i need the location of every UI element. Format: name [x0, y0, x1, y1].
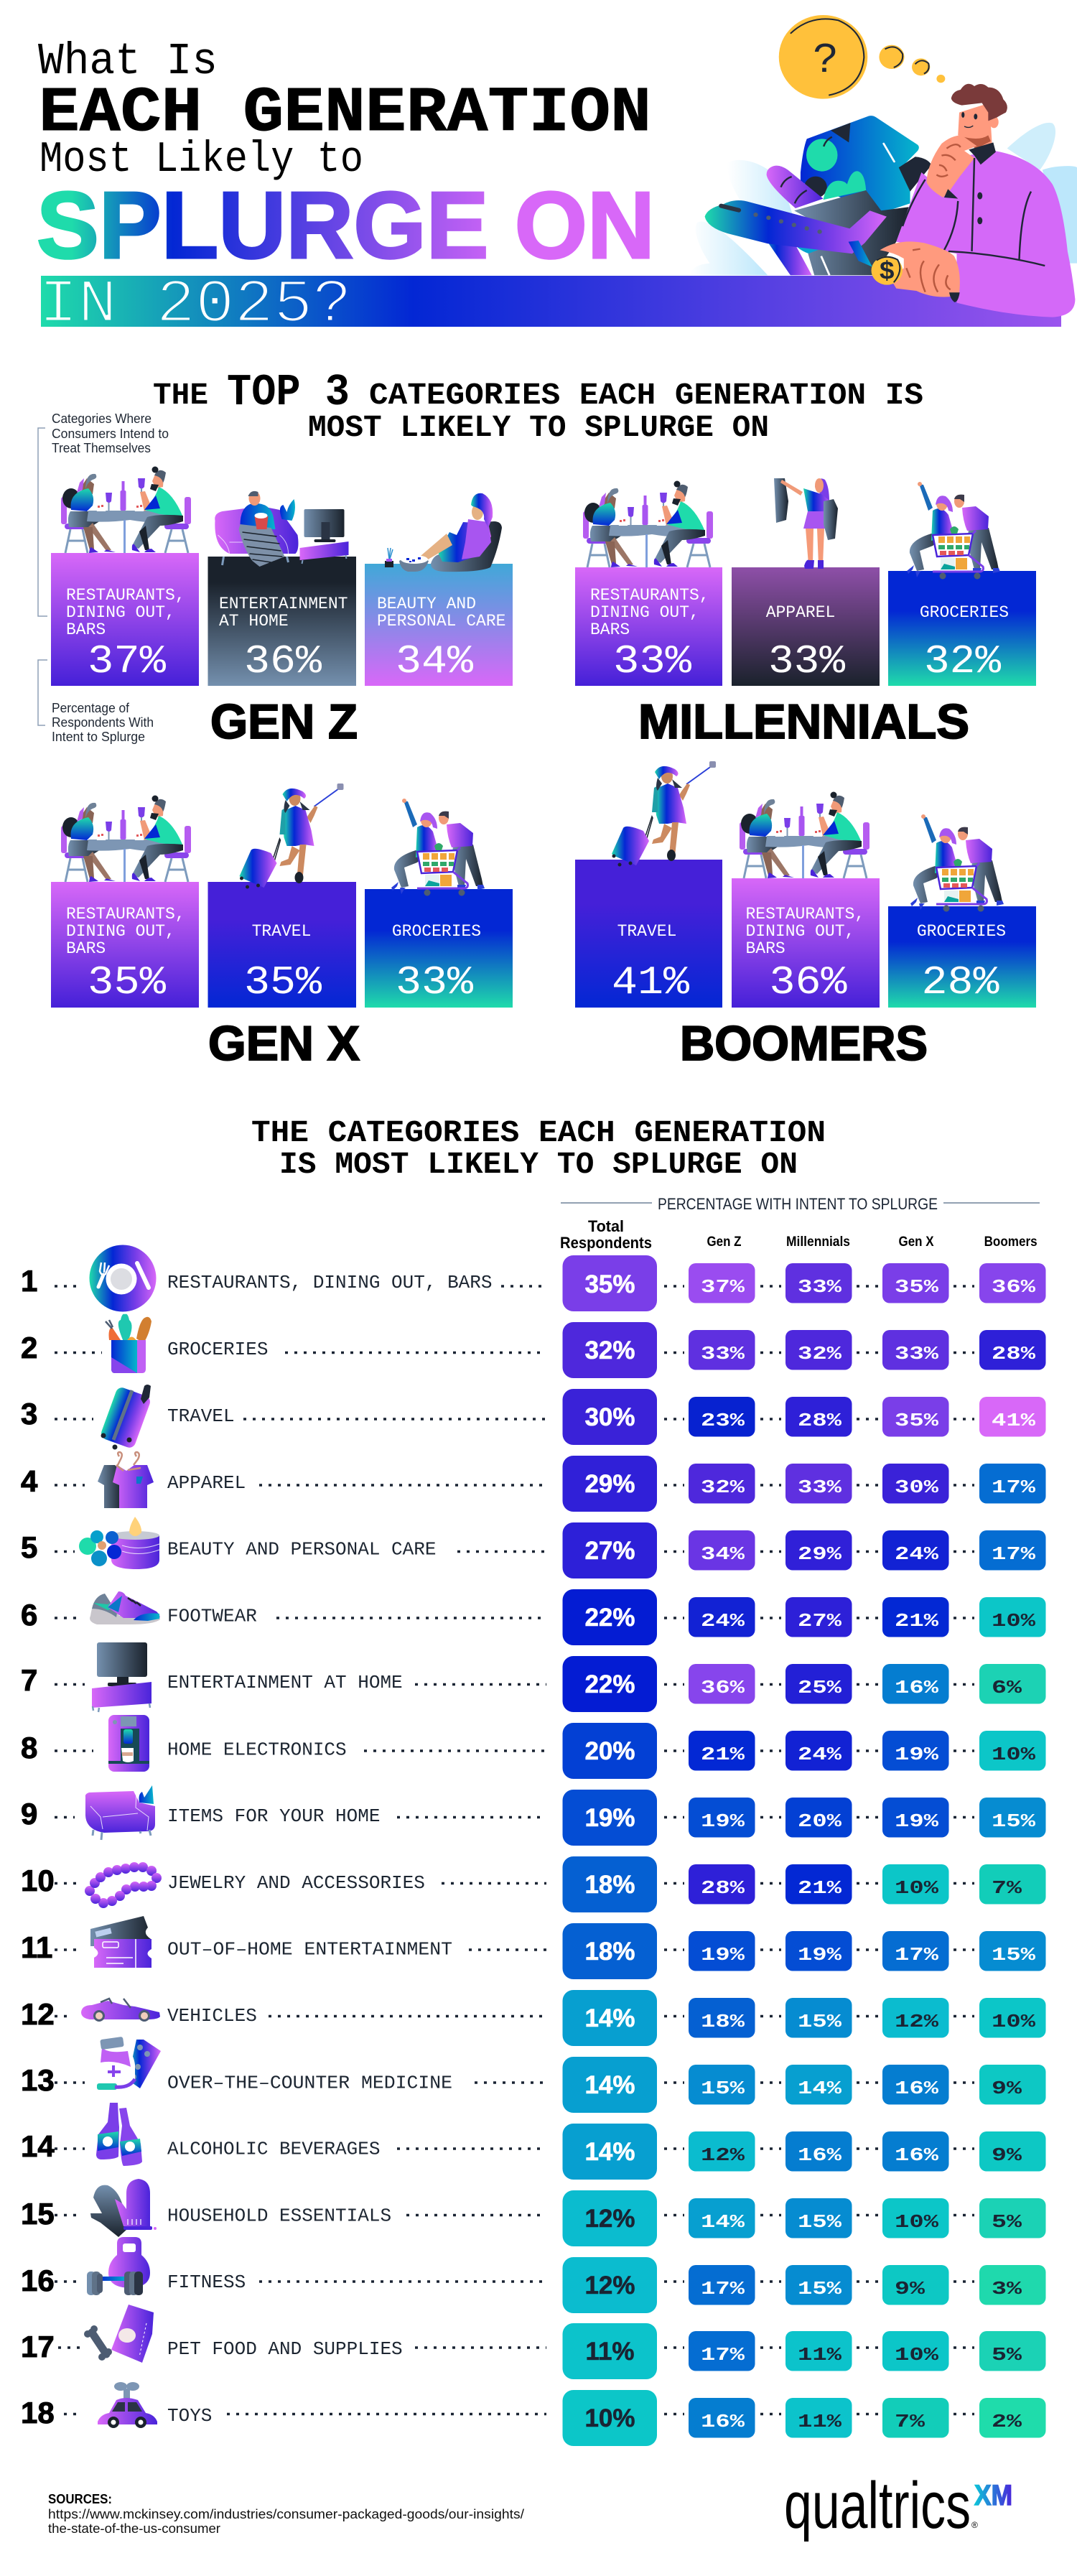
- total 29%: [563, 1456, 657, 1512]
- illustration: shopping cart couple: [910, 814, 1004, 912]
- bar: restaurants: BARS: [66, 939, 106, 958]
- row 5: 29%: [798, 1543, 842, 1565]
- row 1: 37%: [701, 1276, 745, 1298]
- row 2: 2: [21, 1331, 37, 1364]
- row 6: [21, 1589, 1045, 1645]
- row 1: 33%: [798, 1276, 842, 1298]
- row 4: 4: [21, 1464, 38, 1498]
- table header: PERCENTAGE WITH INTENT TO SPLURGE: [658, 1195, 938, 1213]
- bar: beauty and personal care: [365, 564, 513, 686]
- bar: apparel: [732, 567, 880, 686]
- row 13: 9%: [992, 2078, 1022, 2099]
- bar: travel: 35%: [244, 959, 322, 1005]
- icon: t-shirts on hangers: [98, 1452, 154, 1508]
- row 14: 16%: [798, 2144, 842, 2166]
- total 11%: 11%: [585, 2338, 635, 2366]
- bar: travel: TRAVEL: [617, 922, 676, 941]
- bar: restaurants: 36%: [770, 959, 847, 1005]
- total 18%: 18%: [584, 1938, 635, 1966]
- row 9: 15%: [992, 1810, 1036, 1832]
- row 4: 17%: [992, 1477, 1036, 1498]
- annotation: percentage note: Intent to Splurge: [52, 730, 145, 744]
- row 2: [21, 1314, 1045, 1378]
- bar: beauty and personal care: BEAUTY AND: [377, 595, 476, 613]
- row 10: 10%: [895, 1877, 939, 1899]
- row 9: ITEMS FOR YOUR HOME: [167, 1805, 380, 1827]
- row 16: FITNESS: [167, 2272, 246, 2293]
- label: gen z: GEN Z: [210, 694, 358, 749]
- row 1: 1: [21, 1264, 37, 1298]
- row 15: 10%: [895, 2211, 939, 2233]
- section heading: the top 3 categories: TOP 3: [227, 367, 350, 418]
- row 13: 16%: [895, 2078, 939, 2099]
- row 17: 17%: [701, 2344, 745, 2366]
- icon: medicine bottle and blister pack: [97, 2037, 161, 2090]
- section heading: categories table: [251, 1115, 826, 1182]
- row 11: 19%: [798, 1944, 842, 1966]
- row 16: 15%: [798, 2278, 842, 2300]
- row 12: 12%: [895, 2011, 939, 2032]
- row 3: TRAVEL: [167, 1405, 235, 1427]
- icon: coffee machine: [108, 1715, 149, 1772]
- total 29%: 29%: [584, 1470, 635, 1498]
- bar: restaurants: DINING OUT,: [745, 922, 854, 941]
- total 35%: [563, 1255, 657, 1311]
- row 15: 5%: [992, 2211, 1022, 2233]
- row 8: 8: [21, 1731, 37, 1764]
- row 9: [21, 1785, 1045, 1846]
- sources: https://www.mckinsey.com/industries/consumer-packaged-goods/our-insights/: [48, 2507, 524, 2521]
- label: boomers: BOOMERS: [680, 1016, 928, 1071]
- row 4: [21, 1452, 1045, 1512]
- bar: restaurants: RESTAURANTS,: [66, 586, 185, 605]
- row 12: 15%: [798, 2011, 842, 2032]
- bar: restaurants: [51, 882, 199, 1008]
- icon: pet food and bone: [84, 2305, 154, 2363]
- icon: convertible car: [81, 1999, 160, 2022]
- annotation: percentage note: Respondents With: [52, 715, 154, 730]
- illustration: foot spa: [385, 493, 502, 572]
- row 8: 19%: [895, 1744, 939, 1765]
- section heading: the top 3 categories: MOST LIKELY TO SPLURGE ON: [308, 410, 769, 445]
- total 10%: [563, 2390, 657, 2446]
- title: SPLURGE ON: [37, 172, 655, 278]
- row 16: 3%: [992, 2278, 1022, 2300]
- title: EACH GENERATION: [39, 78, 651, 149]
- row 3: 3: [21, 1397, 37, 1431]
- total 19%: [563, 1790, 657, 1846]
- row 7: 25%: [798, 1677, 842, 1698]
- icon: dollar coin: $: [880, 256, 895, 284]
- row 18: TOYS: [167, 2405, 212, 2427]
- sources: SOURCES:: [48, 2492, 112, 2506]
- row 4: 33%: [798, 1477, 842, 1498]
- row 12: 12: [21, 1997, 55, 2031]
- row 11: 15%: [992, 1944, 1036, 1966]
- section heading: the top 3 categories: CATEGORIES EACH GENERATION IS: [369, 378, 923, 413]
- total 22%: [563, 1656, 657, 1712]
- total 22%: [563, 1589, 657, 1645]
- sources: the-state-of-the-us-consumer: [48, 2521, 220, 2536]
- total 14%: [563, 2124, 657, 2180]
- row 1: 35%: [895, 1276, 939, 1298]
- row 14: 14: [21, 2129, 55, 2163]
- row 1: RESTAURANTS, DINING OUT, BARS: [167, 1272, 492, 1293]
- row 16: [21, 2237, 1045, 2313]
- row 4: APPAREL: [167, 1472, 246, 1494]
- panel: gen z: [51, 467, 513, 749]
- row 6: 6: [21, 1598, 37, 1632]
- total 11%: [563, 2323, 657, 2379]
- annotation: categories note: Treat Themselves: [52, 441, 151, 455]
- row 7: ENTERTAINMENT AT HOME: [167, 1672, 403, 1693]
- row 6: 10%: [992, 1610, 1036, 1632]
- bar: restaurants: [575, 567, 722, 686]
- bar: travel: TRAVEL: [252, 922, 311, 941]
- bar: restaurants: 35%: [88, 959, 166, 1005]
- row 10: 10: [21, 1864, 55, 1897]
- row 13: [21, 2037, 1045, 2113]
- row 17: PET FOOD AND SUPPLIES: [167, 2338, 403, 2360]
- row 5: 24%: [895, 1543, 939, 1565]
- row 4: 30%: [895, 1477, 939, 1498]
- icon: sofa and plant: [85, 1785, 155, 1840]
- table header: [560, 1195, 1040, 1252]
- bar: restaurants: [732, 878, 880, 1008]
- row 15: 15%: [798, 2211, 842, 2233]
- bar: restaurants: [51, 553, 199, 686]
- sources: [48, 2492, 524, 2536]
- total 22%: 22%: [584, 1604, 635, 1632]
- row 16: 16: [21, 2264, 55, 2297]
- bar: travel: 41%: [612, 959, 689, 1005]
- bar: restaurants: 33%: [613, 638, 691, 684]
- row 3: [21, 1385, 1045, 1449]
- bar: entertainment at home: ENTERTAINMENT: [219, 595, 348, 613]
- figure: man: [880, 84, 1075, 317]
- annotation: categories note: [38, 411, 169, 616]
- row 2: 33%: [701, 1343, 745, 1364]
- row 2: 28%: [992, 1343, 1036, 1364]
- total 19%: 19%: [584, 1804, 635, 1832]
- bar: groceries: 28%: [922, 959, 999, 1005]
- total 12%: [563, 2190, 657, 2246]
- bar: groceries: 32%: [924, 638, 1001, 684]
- bar: beauty and personal care: PERSONAL CARE: [377, 612, 505, 631]
- icon: grocery bag: [106, 1314, 151, 1373]
- bar: restaurants: BARS: [66, 620, 106, 639]
- section heading: categories table: THE CATEGORIES EACH GENERATION: [251, 1115, 826, 1150]
- row 8: HOME ELECTRONICS: [167, 1739, 347, 1761]
- row 18: 11%: [798, 2411, 842, 2432]
- row 5: 34%: [701, 1543, 745, 1565]
- annotation: percentage note: Percentage of: [52, 701, 130, 715]
- row 13: 15%: [701, 2078, 745, 2099]
- table header: Total: [588, 1217, 624, 1235]
- annotation: categories note: Consumers Intend to: [52, 427, 169, 441]
- bar: groceries: [888, 571, 1036, 686]
- icon: kettlebell and dumbbell: [87, 2237, 150, 2295]
- bar: groceries: GROCERIES: [917, 922, 1006, 941]
- icon: sneaker: [90, 1591, 160, 1624]
- title: IN 2025?: [39, 270, 352, 340]
- icon: bottles: [96, 2103, 142, 2166]
- total 18%: [563, 1923, 657, 1979]
- row 10: 21%: [798, 1877, 842, 1899]
- row 3: 41%: [992, 1410, 1036, 1431]
- bar: restaurants: DINING OUT,: [590, 603, 699, 622]
- title: Most Likely to: [39, 136, 363, 185]
- bar: restaurants: DINING OUT,: [66, 922, 175, 941]
- row 6: 21%: [895, 1610, 939, 1632]
- total 32%: 32%: [584, 1336, 635, 1364]
- section heading: the top 3 categories: THE: [153, 378, 208, 413]
- illustration: dining couple: [740, 791, 869, 878]
- row 7: [21, 1642, 1045, 1712]
- row 6: 27%: [798, 1610, 842, 1632]
- table header: Millennials: [786, 1234, 850, 1250]
- annotation: categories note: Categories Where: [52, 411, 151, 426]
- icon: suitcase: [100, 1385, 151, 1449]
- row 1: 36%: [992, 1276, 1036, 1298]
- row 11: OUT–OF–HOME ENTERTAINMENT: [167, 1939, 452, 1961]
- row 5: 17%: [992, 1543, 1036, 1565]
- total 32%: [563, 1322, 657, 1378]
- row 4: 32%: [701, 1477, 745, 1498]
- icon: plate and cutlery: [89, 1245, 157, 1311]
- bar: groceries: [888, 906, 1036, 1008]
- bar: groceries: [365, 889, 513, 1008]
- bar: travel: [208, 882, 356, 1008]
- icon: thought bubbles with question mark: ?: [813, 35, 837, 81]
- section heading: the top 3 categories: [153, 367, 923, 445]
- bar: entertainment at home: AT HOME: [219, 612, 289, 631]
- row 8: [21, 1715, 1045, 1779]
- row 5: BEAUTY AND PERSONAL CARE: [167, 1538, 436, 1560]
- bar: entertainment at home: [208, 557, 356, 686]
- row 17: 17: [21, 2330, 55, 2363]
- row 13: 13: [21, 2063, 55, 2097]
- total 27%: 27%: [584, 1537, 635, 1565]
- row 11: 17%: [895, 1944, 939, 1966]
- row 5: 5: [21, 1530, 37, 1564]
- row 18: 18: [21, 2396, 55, 2429]
- row 9: 9: [21, 1797, 37, 1831]
- row 17: 11%: [798, 2344, 842, 2366]
- row 16: 17%: [701, 2278, 745, 2300]
- total 14%: 14%: [584, 2071, 635, 2099]
- annotation: percentage note: [38, 660, 154, 744]
- row 17: [21, 2305, 1045, 2379]
- row 8: 24%: [798, 1744, 842, 1765]
- illustration: traveller: [240, 784, 343, 889]
- row 18: 2%: [992, 2411, 1022, 2432]
- bar: restaurants: BARS: [745, 939, 785, 958]
- row 18: [21, 2382, 1045, 2446]
- row 18: 16%: [701, 2411, 745, 2432]
- row 2: 32%: [798, 1343, 842, 1364]
- row 1: [21, 1245, 1045, 1311]
- row 18: 7%: [895, 2411, 926, 2432]
- section heading: categories table: IS MOST LIKELY TO SPLURGE ON: [279, 1147, 798, 1182]
- title: What Is: [38, 36, 218, 87]
- illustration: dining couple: [583, 481, 713, 567]
- table header: Boomers: [984, 1234, 1038, 1250]
- row 2: 33%: [895, 1343, 939, 1364]
- bar: restaurants: RESTAURANTS,: [66, 905, 185, 924]
- total 14%: 14%: [584, 2004, 635, 2032]
- bar: apparel: 33%: [768, 638, 845, 684]
- logo: qualtrics xm: XM: [974, 2480, 1012, 2511]
- panel: millennials: [575, 478, 1036, 749]
- row 10: JEWELRY AND ACCESSORIES: [167, 1872, 425, 1894]
- row 9: 19%: [895, 1810, 939, 1832]
- icon: bead necklace: [85, 1862, 162, 1908]
- logo: qualtrics xm: qualtrics: [784, 2469, 971, 2542]
- icon: tv on cabinet: [92, 1642, 151, 1712]
- row 11: 19%: [701, 1944, 745, 1966]
- row 11: 11: [21, 1930, 52, 1964]
- icon: oven mitts: [90, 2179, 157, 2237]
- row 15: 14%: [701, 2211, 745, 2233]
- bar: groceries: 33%: [396, 959, 473, 1005]
- bar: travel: [575, 860, 722, 1008]
- total 20%: 20%: [584, 1737, 635, 1765]
- row 14: 16%: [895, 2144, 939, 2166]
- illustration: woman with clothes: [774, 478, 838, 569]
- total 18%: 18%: [584, 1871, 635, 1899]
- illustration: watching tv: [215, 491, 349, 567]
- illustration: traveller: [612, 761, 716, 866]
- illustration: dining couple: [61, 796, 191, 882]
- row 10: 28%: [701, 1877, 745, 1899]
- bar: restaurants: RESTAURANTS,: [745, 905, 864, 924]
- illustration: shopping cart couple: [391, 799, 485, 896]
- row 9: 20%: [798, 1810, 842, 1832]
- table header: Respondents: [560, 1234, 652, 1252]
- icon: thought bubbles with question mark: [779, 15, 945, 99]
- row 3: 35%: [895, 1410, 939, 1431]
- total 27%: [563, 1522, 657, 1578]
- row 16: 9%: [895, 2278, 926, 2300]
- row 5: [21, 1517, 1045, 1578]
- row 17: 10%: [895, 2344, 939, 2366]
- total 12%: [563, 2257, 657, 2313]
- bar: apparel: APPAREL: [766, 603, 835, 622]
- title: [37, 36, 1061, 340]
- bar: entertainment at home: 36%: [244, 638, 322, 684]
- row 10: 7%: [992, 1877, 1022, 1899]
- bar: restaurants: 37%: [88, 638, 166, 684]
- row 14: 9%: [992, 2144, 1022, 2166]
- total 30%: [563, 1389, 657, 1445]
- row 15: HOUSEHOLD ESSENTIALS: [167, 2205, 391, 2226]
- row 7: 16%: [895, 1677, 939, 1698]
- row 2: GROCERIES: [167, 1339, 268, 1360]
- row 12: 10%: [992, 2011, 1036, 2032]
- total 20%: [563, 1723, 657, 1779]
- row 15: 15: [21, 2197, 55, 2231]
- total 10%: 10%: [584, 2404, 635, 2432]
- total 12%: 12%: [584, 2205, 635, 2233]
- table header: Gen Z: [707, 1234, 742, 1250]
- row 12: [21, 1990, 1045, 2046]
- row 14: [21, 2103, 1045, 2180]
- bar: restaurants: RESTAURANTS,: [590, 586, 709, 605]
- row 11: [21, 1916, 1045, 1979]
- bar: groceries: GROCERIES: [392, 922, 481, 941]
- row 3: 28%: [798, 1410, 842, 1431]
- logo: qualtrics xm: ®: [971, 2520, 978, 2530]
- row 7: 36%: [701, 1677, 745, 1698]
- total 22%: 22%: [584, 1670, 635, 1698]
- table header: Gen X: [899, 1234, 934, 1250]
- illustration: shopping cart couple: [907, 482, 1000, 579]
- row 8: 21%: [701, 1744, 745, 1765]
- label: millennials: MILLENNIALS: [638, 694, 969, 749]
- label: gen x: GEN X: [208, 1016, 360, 1071]
- icon: dollar coin: [872, 256, 903, 285]
- panel: boomers: [575, 761, 1036, 1071]
- icon: tickets: [90, 1916, 151, 1968]
- row 13: OVER–THE–COUNTER MEDICINE: [167, 2073, 452, 2094]
- row 6: FOOTWEAR: [167, 1606, 257, 1627]
- total 14%: [563, 2057, 657, 2113]
- bar: restaurants: DINING OUT,: [66, 603, 175, 622]
- row 10: [21, 1856, 1045, 1912]
- row 3: 23%: [701, 1410, 745, 1431]
- bar: groceries: GROCERIES: [920, 603, 1009, 622]
- total 14%: [563, 1990, 657, 2046]
- row 13: 14%: [798, 2078, 842, 2099]
- bar: beauty and personal care: 34%: [396, 638, 473, 684]
- row 7: 6%: [992, 1677, 1022, 1698]
- row 12: VEHICLES: [167, 2005, 257, 2027]
- row 9: 19%: [701, 1810, 745, 1832]
- row 14: 12%: [701, 2144, 745, 2166]
- row 14: ALCOHOLIC BEVERAGES: [167, 2139, 380, 2160]
- row 8: 10%: [992, 1744, 1036, 1765]
- illustration: dining couple: [61, 467, 191, 553]
- icon: candle and flower: [79, 1517, 159, 1569]
- total 30%: 30%: [584, 1403, 635, 1431]
- row 6: 24%: [701, 1610, 745, 1632]
- hero illustration: man thinking about splurges: [690, 15, 1077, 317]
- total 35%: 35%: [584, 1270, 635, 1298]
- row 17: 5%: [992, 2344, 1022, 2366]
- panel: gen x: [51, 784, 513, 1071]
- row 12: 18%: [701, 2011, 745, 2032]
- bar: restaurants: BARS: [590, 620, 630, 639]
- row 15: [21, 2179, 1045, 2246]
- total 18%: [563, 1856, 657, 1912]
- total 14%: 14%: [584, 2138, 635, 2166]
- icon: wind-up toy car: [98, 2382, 157, 2428]
- total 12%: 12%: [584, 2272, 635, 2300]
- row 7: 7: [21, 1663, 37, 1697]
